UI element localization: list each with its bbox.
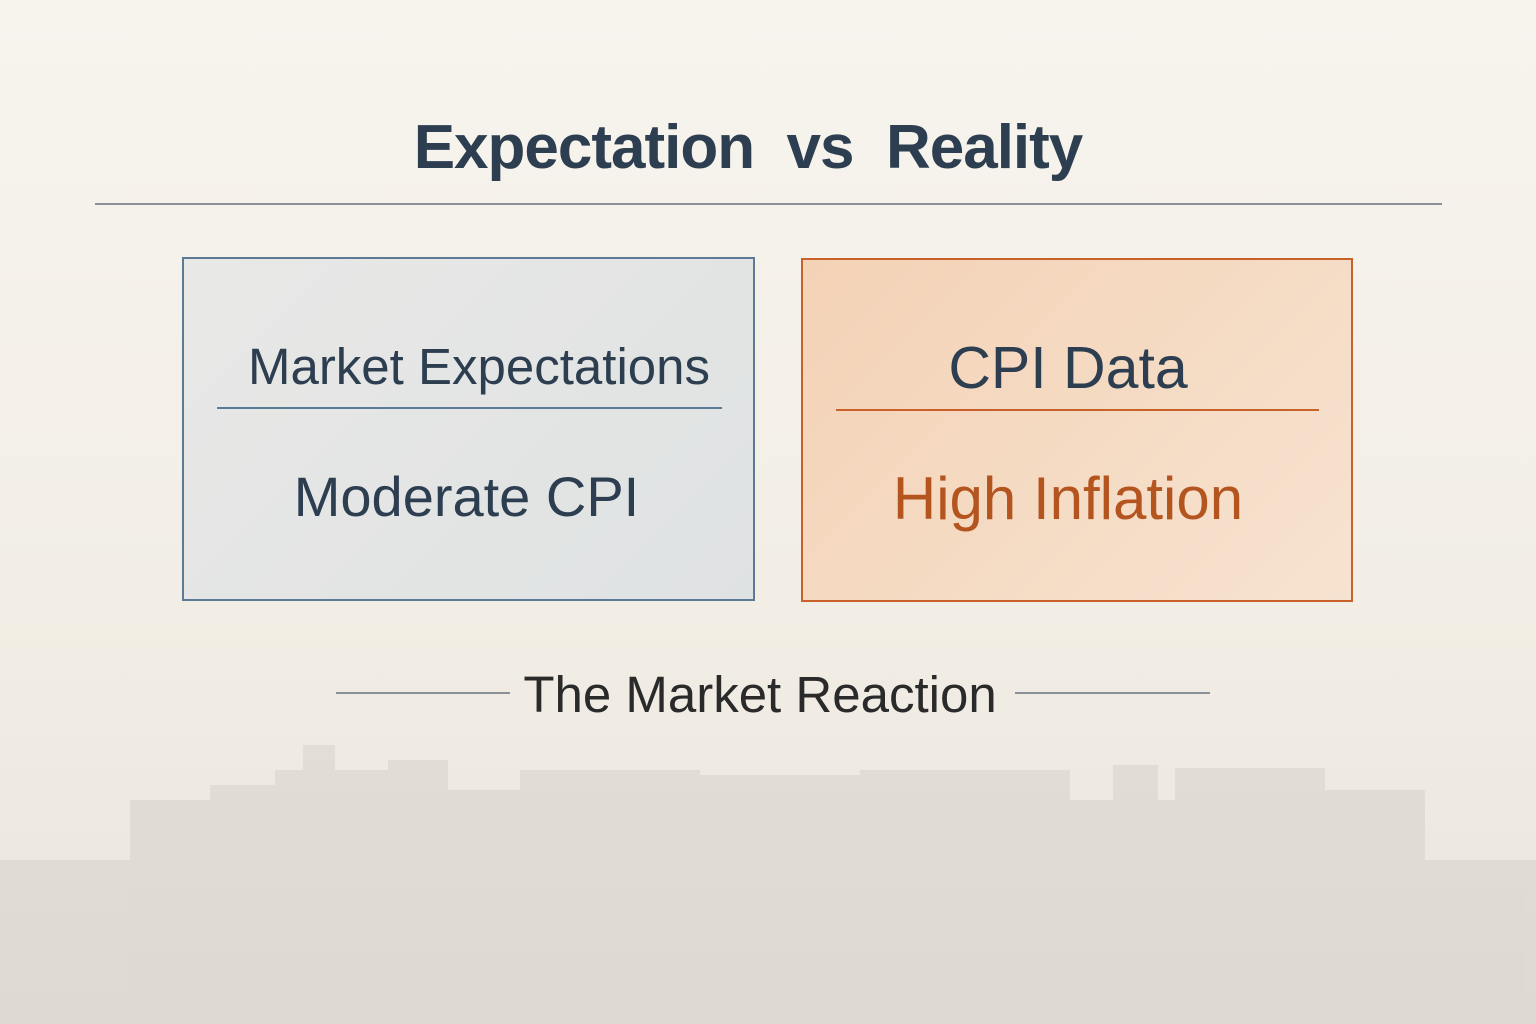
subheading: The Market Reaction: The Market Reaction — [523, 666, 997, 723]
heading: CPI Data: CPI Data — [948, 335, 1188, 401]
text: High Inflation: High Inflation — [893, 465, 1243, 532]
panel: CPI data — [801, 258, 1353, 602]
panel: market expectations — [182, 257, 755, 601]
text: Moderate CPI: Moderate CPI — [294, 465, 639, 528]
title: Expectation vs Reality — [414, 113, 1082, 182]
heading: Market Expectations: Market Expectations — [248, 338, 710, 395]
